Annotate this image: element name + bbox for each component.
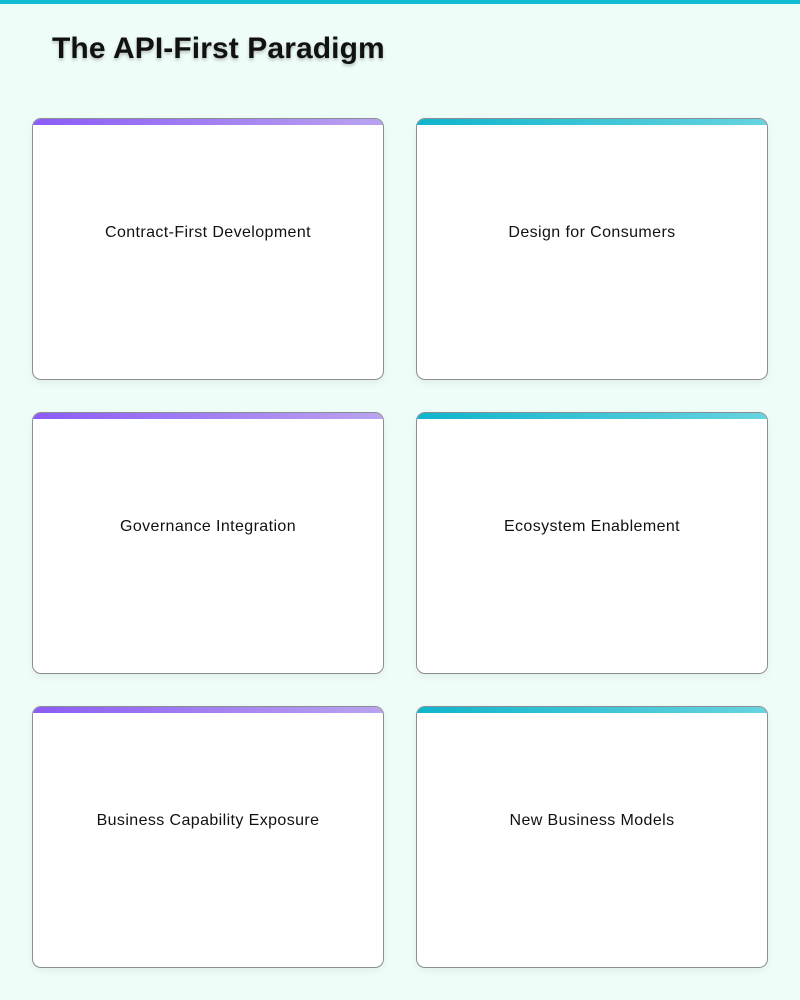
panel: business capability exposure: Business Capability Exposure [97,812,319,829]
panel: design for consumers [416,118,768,380]
panel: ecosystem enablement [416,412,768,674]
panel: new business models: New Business Models [510,812,674,829]
panel: business capability exposure [32,706,384,968]
panel: design for consumers: Design for Consumers [508,224,676,241]
panel: contract-first development: Contract-First Development [105,224,311,241]
panel: governance integration [32,412,384,674]
title: The API-First Paradigm [52,32,385,65]
panel: contract-first development [32,118,384,380]
panel: ecosystem enablement: Ecosystem Enablement [504,518,680,535]
panel: governance integration: Governance Integration [120,518,296,535]
panel: new business models [416,706,768,968]
